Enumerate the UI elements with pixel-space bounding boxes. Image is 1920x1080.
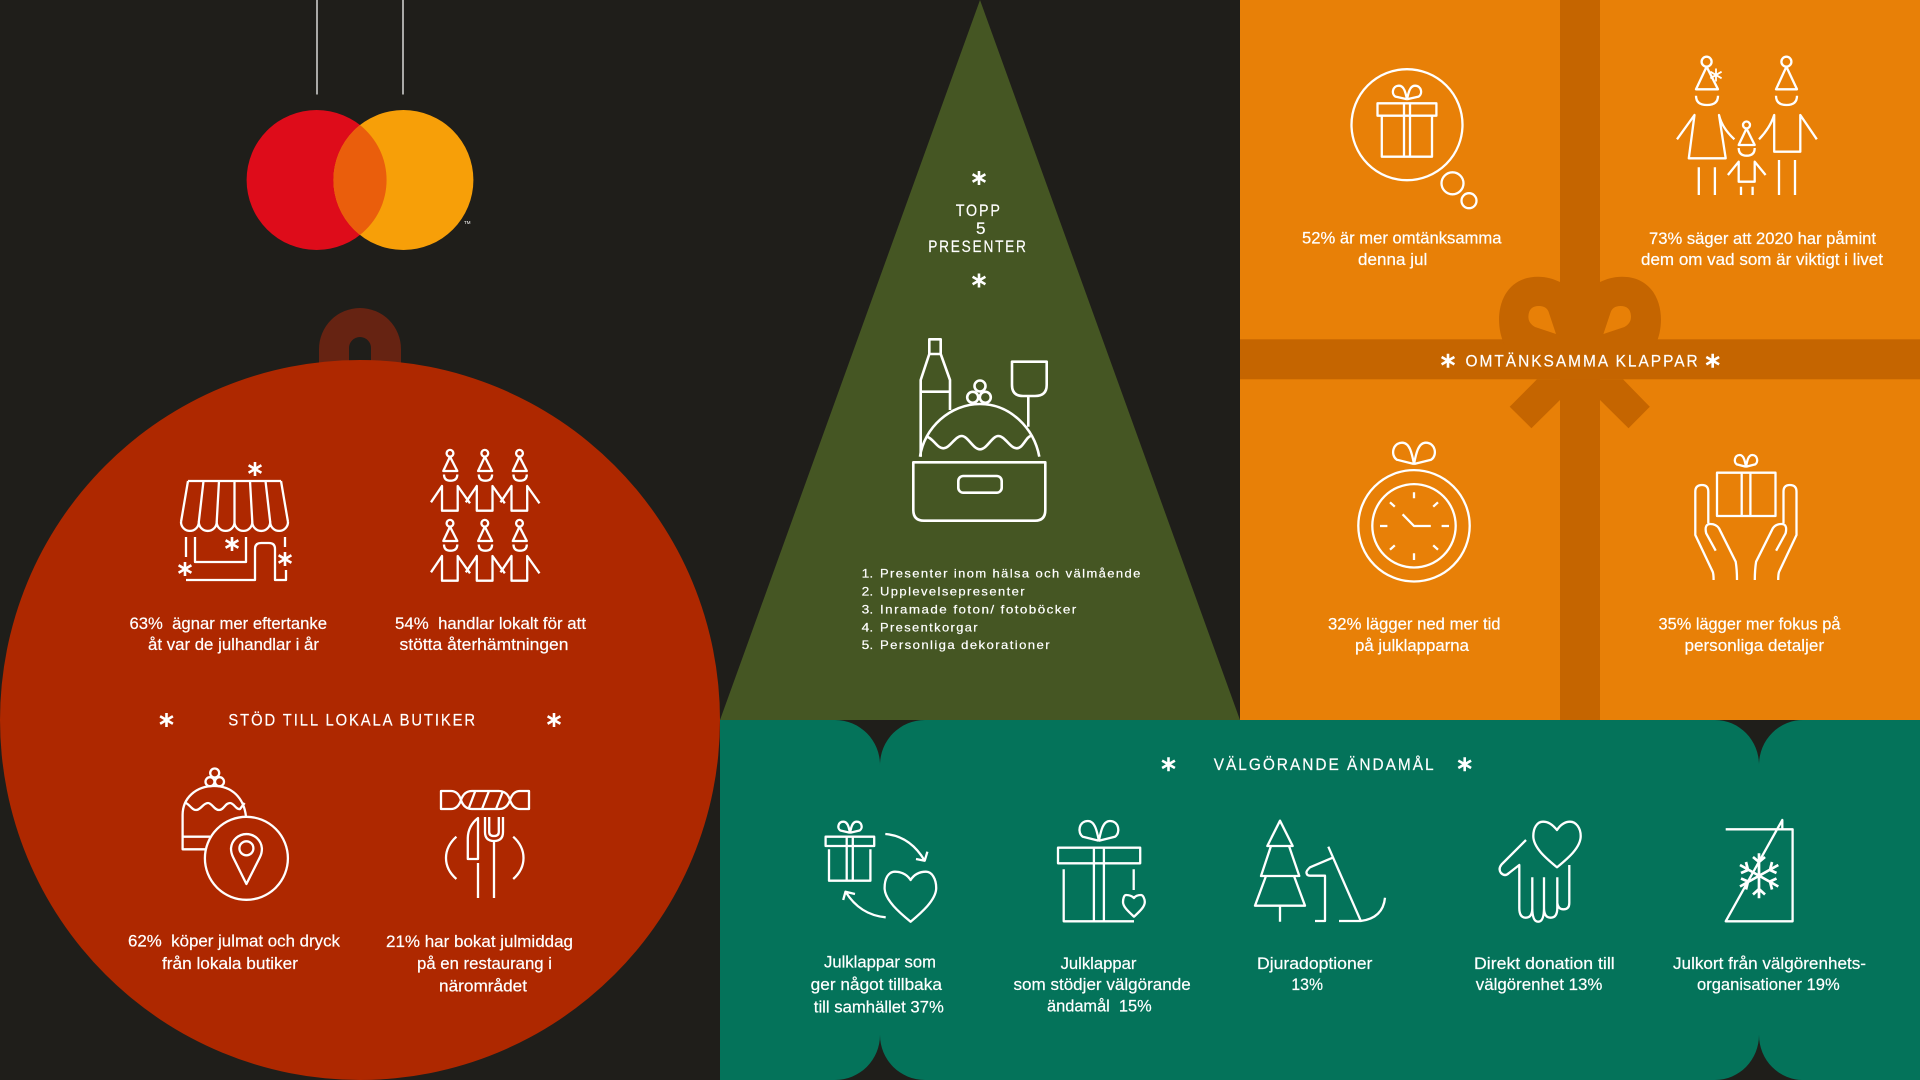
- text: 73%: [1641, 229, 1883, 269]
- heading: välgörande ändamål: VÄLGÖRANDE ÄNDAMÅL: [1214, 755, 1436, 774]
- text: 73%: 73% säger att 2020 har påmint: [1649, 229, 1876, 248]
- text: 63%: åt var de julhandlar i år: [148, 635, 319, 654]
- panel: stöd till lokala butiker (ornament): [0, 360, 720, 1080]
- text: 32%: 32% lägger ned mer tid: [1328, 614, 1501, 633]
- text: julklappar som stödjer välgörande ändamål: [1014, 954, 1191, 1016]
- list: top five gifts: [862, 567, 1142, 652]
- text: 62%: [128, 932, 340, 973]
- text: 35%: [1658, 614, 1841, 655]
- list: top five gifts: 5.: [862, 638, 873, 652]
- text: julklappar som ger något tillbaka: [811, 952, 944, 1017]
- text: 21%: [386, 932, 573, 996]
- text: julklappar som ger något tillbaka: till samhället 37%: [814, 998, 944, 1017]
- text: 54%: [395, 614, 586, 654]
- list: top five gifts: 4.: [862, 620, 873, 634]
- text: 52%: 52% är mer omtänksamma: [1302, 228, 1502, 247]
- text: 35%: personliga detaljer: [1684, 636, 1824, 655]
- text: 21%: 21% har bokat julmiddag: [386, 932, 573, 951]
- heading: topp 5 presenter: TOPP: [956, 201, 1002, 220]
- logo: two overlapping circles: [247, 110, 473, 250]
- text: 62%: 62% köper julmat och dryck: [128, 932, 340, 951]
- text: 32%: på julklapparna: [1355, 636, 1470, 655]
- icon: family: [1677, 57, 1817, 195]
- panel: topp 5 presenter (tree): [720, 0, 1240, 720]
- text: djuradoptioner: [1257, 954, 1373, 994]
- list: top five gifts: Presenter inom hälsa och välmående: [880, 567, 1142, 581]
- icon: card with snowflake: [1726, 820, 1793, 921]
- text: julklappar som ger något tillbaka: ger något tillbaka: [811, 975, 943, 994]
- hanging strings: [317, 0, 403, 94]
- list: top five gifts: 3.: [862, 602, 873, 616]
- icon: bauble with location pin: [183, 768, 288, 900]
- text: 54%: 54% handlar lokalt för att: [395, 614, 586, 633]
- list: top five gifts: 1.: [862, 567, 873, 581]
- heading: topp 5 presenter: [928, 171, 1028, 288]
- heading: topp 5 presenter: PRESENTER: [928, 237, 1028, 256]
- icon: cracker and cutlery: [441, 791, 529, 898]
- text: julkort: Julkort från välgörenhets-: [1673, 954, 1866, 973]
- text: djuradoptioner: 13%: [1291, 975, 1323, 994]
- icon: six people with party hats: [431, 450, 540, 581]
- text: djuradoptioner: Djuradoptioner: [1257, 954, 1373, 973]
- icon: shop with snowflakes: [179, 462, 291, 580]
- icon: gift with heart tag: [1058, 821, 1145, 921]
- text: julkort: organisationer 19%: [1697, 975, 1840, 994]
- heading: stöd till lokala butiker: STÖD TILL LOKALA BUTIKER: [228, 711, 477, 730]
- text: julkort: [1673, 954, 1866, 994]
- heading: topp 5 presenter: 5: [976, 219, 986, 238]
- text: 63%: 63% ägnar mer eftertanke: [130, 614, 327, 633]
- list: top five gifts: 2.: [862, 584, 873, 598]
- icon: hand with heart: [1500, 822, 1581, 922]
- text: julklappar som stödjer välgörande ändamål: som stödjer välgörande: [1014, 975, 1191, 994]
- text: 62%: från lokala butiker: [162, 954, 298, 973]
- text: julklappar som stödjer välgörande ändamål: Julklappar: [1061, 954, 1137, 973]
- ribbon and bow: [1240, 0, 1920, 720]
- text: 54%: stötta återhämtningen: [400, 635, 568, 654]
- text: julklappar som stödjer välgörande ändamål: ändamål 15%: [1047, 997, 1152, 1016]
- text: 35%: 35% lägger mer fokus på: [1658, 614, 1841, 633]
- icon: clock with bow: [1358, 443, 1470, 582]
- icon: gift thought bubble: [1352, 69, 1476, 208]
- text: 21%: på en restaurang i: [417, 954, 552, 973]
- heading: omtänksamma klappar: OMTÄNKSAMMA KLAPPAR: [1466, 352, 1700, 371]
- icon: hands holding gift: [1695, 455, 1796, 580]
- text: 63%: [130, 614, 327, 654]
- text: 21%: närområdet: [439, 977, 527, 996]
- text: direkt donation: välgörenhet 13%: [1476, 975, 1602, 994]
- list: top five gifts: Personliga dekorationer: [880, 638, 1051, 652]
- text: direkt donation: Direkt donation till: [1474, 954, 1615, 973]
- list: top five gifts: Presentkorgar: [880, 620, 979, 634]
- text: 52%: denna jul: [1358, 250, 1427, 269]
- list: top five gifts: Upplevelsepresenter: [880, 584, 1026, 598]
- panel: omtänksamma klappar (gift box): [1240, 0, 1920, 720]
- text: 32%: [1328, 614, 1501, 655]
- icon: gift basket: [913, 339, 1047, 521]
- list: top five gifts: Inramade foton/ fotoböcker: [880, 602, 1078, 616]
- text: julklappar som ger något tillbaka: Julklappar som: [824, 952, 936, 971]
- ornament hook: [319, 308, 401, 372]
- text: direkt donation: [1474, 954, 1615, 994]
- icon: gift and heart cycle: [826, 822, 936, 922]
- tag notches: [835, 720, 1804, 1080]
- icon: tree and dog: [1255, 821, 1385, 922]
- text: 73%: dem om vad som är viktigt i livet: [1641, 250, 1883, 269]
- panel: välgörande ändamål (gift tag): [720, 720, 1920, 1080]
- logo: two overlapping circles: TM: [464, 220, 471, 225]
- text: 52%: [1302, 228, 1502, 269]
